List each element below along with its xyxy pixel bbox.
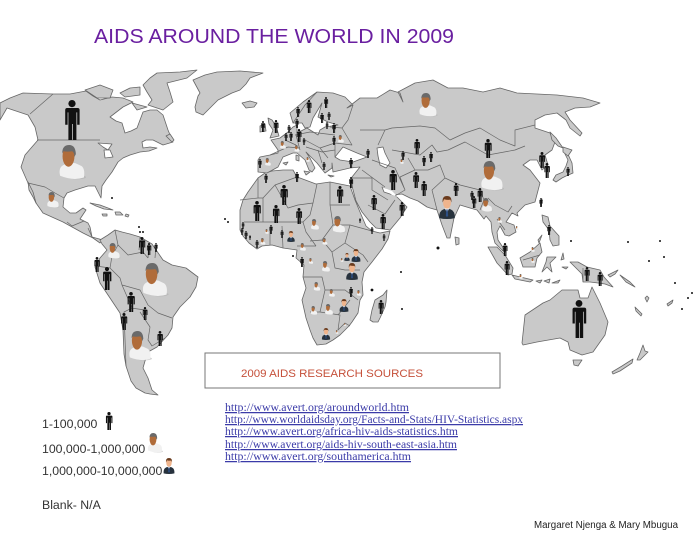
sulawesi bbox=[542, 257, 556, 272]
borneo bbox=[520, 243, 542, 267]
japan and sakhalin bbox=[553, 150, 573, 182]
people markers: 1-100,000 figures bbox=[65, 97, 603, 346]
inland seas bbox=[335, 147, 390, 168]
legend bbox=[42, 412, 174, 512]
new guinea bbox=[570, 262, 613, 287]
source links: http://www.avert.org/aids-hiv-south-east-asia.htm bbox=[225, 439, 457, 451]
melanesia bbox=[608, 270, 673, 306]
legend: 1-100,000 bbox=[42, 417, 98, 431]
new caledonia bbox=[635, 307, 642, 316]
philippines bbox=[538, 215, 559, 246]
greenland bbox=[193, 71, 263, 115]
islands bbox=[111, 197, 693, 310]
title: AIDS AROUND THE WORLD IN 2009 bbox=[94, 25, 454, 48]
baja and arctic islands bbox=[28, 70, 197, 217]
source links: http://www.avert.org/aroundworld.htm bbox=[225, 402, 409, 414]
legend icon: figure bbox=[106, 412, 112, 430]
source links bbox=[225, 402, 523, 463]
great lakes bbox=[98, 143, 113, 158]
africa bbox=[240, 170, 390, 345]
country borders bbox=[28, 92, 583, 366]
credit: Margaret Njenga & Mary Mbugua bbox=[534, 520, 678, 531]
sri lanka bbox=[455, 237, 459, 245]
mediterranean islands bbox=[283, 155, 334, 177]
source links: http://www.worldaidsday.org/Facts-and-Stats/HIV-Statistics.aspx bbox=[225, 414, 523, 426]
legend icon: user bbox=[148, 433, 163, 453]
world map bbox=[0, 70, 693, 395]
legend: 100,000-1,000,000 bbox=[42, 442, 145, 456]
iceland bbox=[242, 101, 257, 108]
people markers: 100,000-1,000,000 figures bbox=[47, 93, 535, 360]
legend icon: executive bbox=[164, 458, 174, 474]
north america bbox=[0, 91, 173, 243]
sources box bbox=[205, 353, 500, 388]
source links: http://www.avert.org/southamerica.htm bbox=[225, 451, 411, 463]
tasmania and new zealand bbox=[573, 345, 648, 374]
taiwan bbox=[540, 199, 542, 206]
legend: Blank- N/A bbox=[42, 498, 102, 512]
moluccas bbox=[561, 253, 568, 269]
java and lesser sundas bbox=[512, 275, 560, 283]
sumatra bbox=[488, 247, 513, 275]
british isles bbox=[268, 118, 279, 138]
people markers: 1,000,000-10,000,000 figures bbox=[287, 196, 455, 340]
source links: http://www.avert.org/africa-hiv-aids-statistics.htm bbox=[225, 426, 458, 438]
south america bbox=[95, 230, 198, 395]
eurasia bbox=[258, 80, 600, 252]
australia bbox=[522, 287, 608, 355]
sources heading: 2009 AIDS RESEARCH SOURCES bbox=[241, 368, 423, 380]
madagascar bbox=[370, 290, 387, 322]
ireland bbox=[260, 124, 266, 132]
legend: 1,000,000-10,000,000 bbox=[42, 464, 163, 478]
